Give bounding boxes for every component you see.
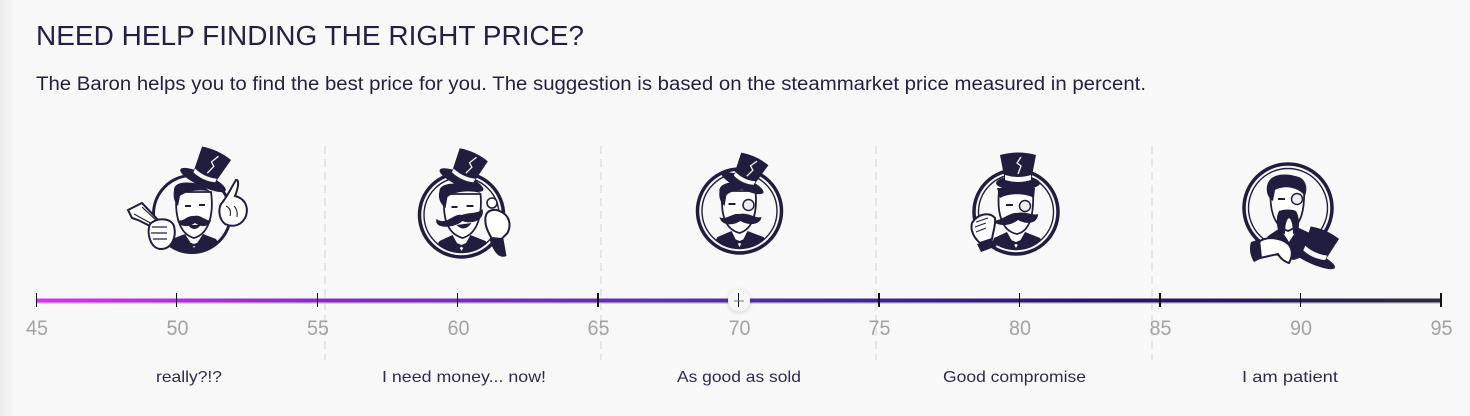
icon: baron with coin — [420, 143, 510, 257]
scale numbers: 90 — [1290, 317, 1312, 340]
scale numbers: 60 — [448, 317, 470, 340]
scale numbers: 45 — [26, 317, 48, 340]
subtitle text: The Baron helps you to find the best price for you. The suggestion is based on the steammarket price measured in percent. — [36, 74, 1146, 95]
scale numbers: 85 — [1150, 317, 1172, 340]
scale numbers: 65 — [588, 317, 610, 340]
slider knob — [728, 290, 750, 312]
segment labels: really?!? — [156, 369, 222, 386]
scale numbers: 80 — [1009, 317, 1031, 340]
icon: baron twirling moustache — [971, 152, 1058, 254]
scale numbers: 50 — [166, 317, 188, 340]
segment labels — [156, 369, 1339, 386]
scale numbers: 95 — [1430, 317, 1452, 340]
title: NEED HELP FINDING THE RIGHT PRICE? — [36, 20, 584, 51]
scale numbers: 55 — [307, 317, 329, 340]
scale numbers — [26, 317, 1452, 340]
icon: baron holding hat — [1244, 164, 1347, 273]
segment labels: I am patient — [1242, 369, 1339, 386]
segment labels: As good as sold — [677, 369, 801, 386]
icon: baron with money, pointing — [128, 140, 247, 256]
price slider — [36, 290, 1441, 312]
scale numbers: 75 — [868, 317, 890, 340]
segment labels: I need money... now! — [382, 369, 546, 386]
segment labels: Good compromise — [943, 369, 1086, 386]
icon: baron with monocle — [698, 147, 782, 253]
scale numbers: 70 — [728, 317, 750, 340]
